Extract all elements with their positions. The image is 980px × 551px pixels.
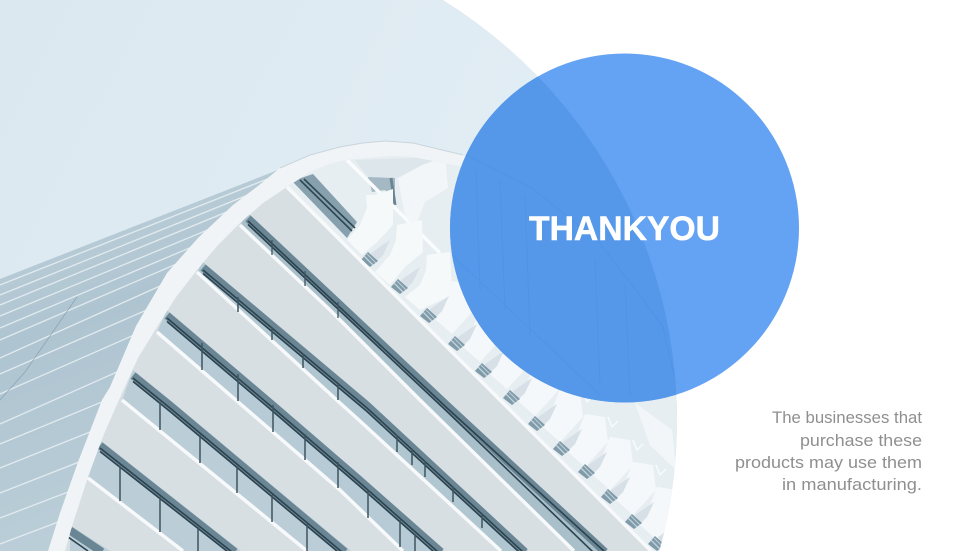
floor 3 bbox=[197, 262, 528, 551]
photo: building in circular crop bbox=[0, 0, 720, 551]
body text: in manufacturing. bbox=[782, 475, 922, 494]
fin zone bbox=[289, 156, 677, 551]
floor 2 bbox=[240, 213, 605, 551]
body text bbox=[735, 408, 922, 494]
body text: products may use them bbox=[735, 453, 922, 472]
floor 4 bbox=[157, 310, 444, 551]
title: THANKYOU bbox=[529, 210, 720, 248]
sky bbox=[0, 0, 538, 279]
body text: purchase these bbox=[800, 431, 922, 450]
window wedges bbox=[361, 240, 677, 551]
floor 1 bbox=[287, 174, 651, 551]
floor 5 bbox=[122, 370, 351, 551]
floor 7 bbox=[68, 525, 110, 551]
circle overlap with photo bbox=[450, 76, 676, 402]
facade panels bbox=[65, 187, 648, 551]
facade bbox=[65, 156, 677, 551]
blue circle bbox=[450, 54, 799, 402]
white arch ring bbox=[48, 140, 466, 551]
curved roof bbox=[0, 170, 278, 551]
body text: The businesses that bbox=[772, 408, 922, 427]
floor 6 bbox=[88, 440, 241, 551]
faint building detail through circle bbox=[452, 155, 674, 395]
